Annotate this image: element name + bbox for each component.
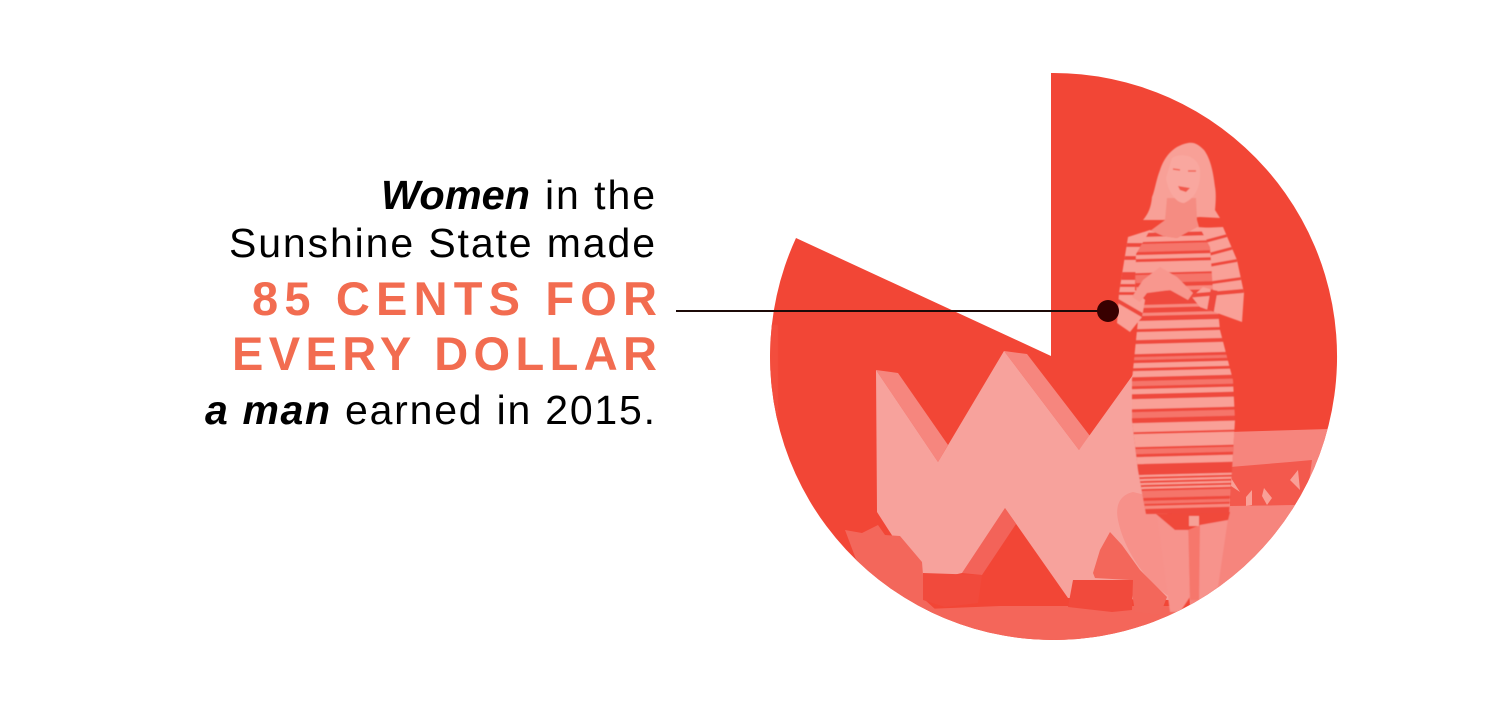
text: a man earned in 2015 xyxy=(205,387,655,433)
stage floor xyxy=(925,606,1180,640)
connector dot xyxy=(1097,300,1119,322)
legs xyxy=(1156,512,1230,612)
mouth xyxy=(1178,186,1190,192)
connector line xyxy=(676,310,1104,312)
highlight: 85 cents for: 85 CENTS FOR xyxy=(252,272,657,325)
dress xyxy=(1132,226,1236,514)
right plant xyxy=(1093,532,1167,606)
left plant xyxy=(845,525,945,618)
neck and chest xyxy=(1150,198,1199,240)
curtain edge xyxy=(770,324,778,424)
hands xyxy=(1132,267,1193,302)
text: women in the: Women xyxy=(381,172,530,218)
stage couch xyxy=(1117,429,1340,610)
face xyxy=(1175,197,1192,204)
left stage monitor xyxy=(923,573,957,601)
left arm xyxy=(1116,230,1149,332)
text: a man earned in 2015: a man xyxy=(205,387,330,433)
right arm xyxy=(1192,226,1244,322)
presenter xyxy=(1110,143,1250,612)
highlight: every dollar: EVERY DOLLAR xyxy=(232,327,657,380)
hair xyxy=(1143,143,1220,220)
right stage monitor xyxy=(1068,580,1133,612)
infographic canvas xyxy=(205,73,1338,640)
W stage logo xyxy=(876,351,1170,600)
text: women in the xyxy=(381,172,655,218)
text: sunshine state made: Sunshine State made xyxy=(229,220,655,266)
pie background xyxy=(760,60,1350,650)
eyes xyxy=(1173,169,1196,171)
pie chart photo: 85 percent slice xyxy=(760,60,1350,650)
text: women in the: in the xyxy=(545,172,655,218)
text: a man earned in 2015: earned in 2015. xyxy=(345,387,655,433)
